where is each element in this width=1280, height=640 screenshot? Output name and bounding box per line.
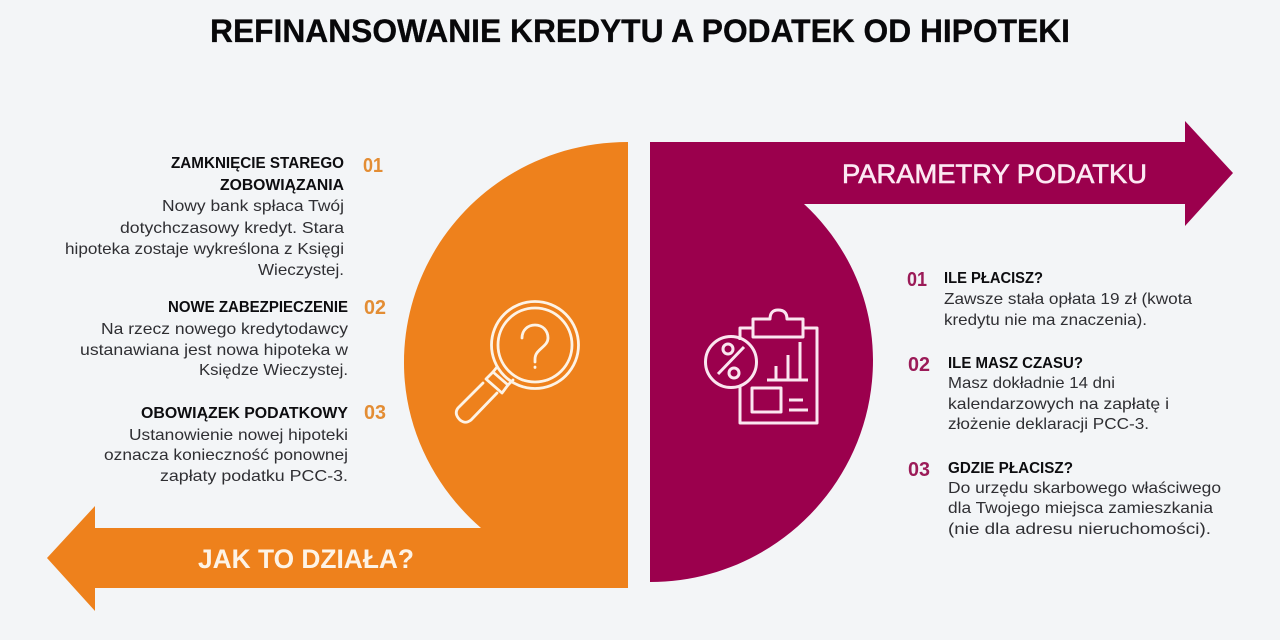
left text block 3: obowiązek podatkowy: zapłaty podatku PCC-3. bbox=[160, 468, 348, 485]
right text block 3: gdzie płacisz: Do urzędu skarbowego właściwego bbox=[948, 480, 1221, 497]
arrow label: parametry podatku: PARAMETRY PODATKU bbox=[842, 159, 1147, 189]
number 02 maroon: 02 bbox=[908, 354, 930, 376]
number 01 orange: 01 bbox=[363, 155, 383, 177]
icon: clipboard with percent and chart bbox=[706, 310, 817, 423]
left text block 2: nowe zabezpieczenie: NOWE ZABEZPIECZENIE bbox=[168, 299, 348, 316]
icon: magnifying glass with question mark bbox=[456, 302, 578, 422]
right text block 2: ile masz czasu: Masz dokładnie 14 dni bbox=[948, 375, 1115, 392]
title: REFINANSOWANIE KREDYTU A PODATEK OD HIPOTEKI bbox=[210, 13, 1070, 49]
number 03 maroon: 03 bbox=[908, 459, 930, 481]
left text block 1: zamknięcie starego zobowiązania: ZAMKNIĘCIE STAREGO bbox=[171, 155, 344, 172]
left text block 2: nowe zabezpieczenie: Księdze Wieczystej. bbox=[199, 362, 348, 379]
right text block 1: ile płacisz bbox=[944, 270, 1192, 329]
right text block 1: ile płacisz: Zawsze stała opłata 19 zł (kwota bbox=[944, 291, 1192, 308]
number 02 orange: 02 bbox=[364, 297, 386, 319]
left text block 1: zamknięcie starego zobowiązania: Wieczystej. bbox=[258, 262, 344, 279]
right text block 2: ile masz czasu: złożenie deklaracji PCC-3. bbox=[948, 416, 1149, 433]
left text block 3: obowiązek podatkowy bbox=[104, 405, 348, 485]
panel: maroon half circle with right arrow bbox=[650, 121, 1233, 582]
left text block 3: obowiązek podatkowy: Ustanowienie nowej hipoteki bbox=[129, 427, 348, 444]
right text block 1: ile płacisz: kredytu nie ma znaczenia). bbox=[944, 312, 1147, 329]
right text block 3: gdzie płacisz: dla Twojego miejsca zamieszkania bbox=[948, 500, 1213, 517]
left text block 2: nowe zabezpieczenie: ustanawiana jest nowa hipoteka w bbox=[80, 342, 348, 359]
left text block 2: nowe zabezpieczenie bbox=[80, 299, 348, 379]
left text block 1: zamknięcie starego zobowiązania bbox=[65, 155, 344, 279]
right text block 2: ile masz czasu: kalendarzowych na zapłatę i bbox=[948, 396, 1169, 413]
right text block 3: gdzie płacisz: GDZIE PŁACISZ? bbox=[948, 460, 1073, 477]
right text block 3: gdzie płacisz: (nie dla adresu nieruchomości). bbox=[948, 521, 1211, 538]
number 03 orange: 03 bbox=[364, 402, 386, 424]
left text block 2: nowe zabezpieczenie: Na rzecz nowego kredytodawcy bbox=[101, 321, 348, 338]
arrow label: jak to działa: JAK TO DZIAŁA? bbox=[198, 544, 414, 574]
left text block 1: zamknięcie starego zobowiązania: dotychczasowy kredyt. Stara bbox=[120, 220, 344, 237]
right text block 2: ile masz czasu bbox=[948, 355, 1169, 433]
left text block 1: zamknięcie starego zobowiązania: ZOBOWIĄZANIA bbox=[220, 177, 344, 194]
left text block 3: obowiązek podatkowy: oznacza konieczność ponownej bbox=[104, 447, 348, 464]
panel: orange half circle with left arrow bbox=[47, 142, 628, 611]
right text block 3: gdzie płacisz bbox=[948, 460, 1221, 538]
right text block 2: ile masz czasu: ILE MASZ CZASU? bbox=[948, 355, 1083, 372]
left text block 3: obowiązek podatkowy: OBOWIĄZEK PODATKOWY bbox=[141, 405, 348, 422]
left text block 1: zamknięcie starego zobowiązania: Nowy bank spłaca Twój bbox=[162, 198, 344, 215]
left text block 1: zamknięcie starego zobowiązania: hipoteka zostaje wykreślona z Księgi bbox=[65, 241, 344, 258]
number 01 maroon: 01 bbox=[907, 269, 927, 291]
right text block 1: ile płacisz: ILE PŁACISZ? bbox=[944, 270, 1043, 287]
